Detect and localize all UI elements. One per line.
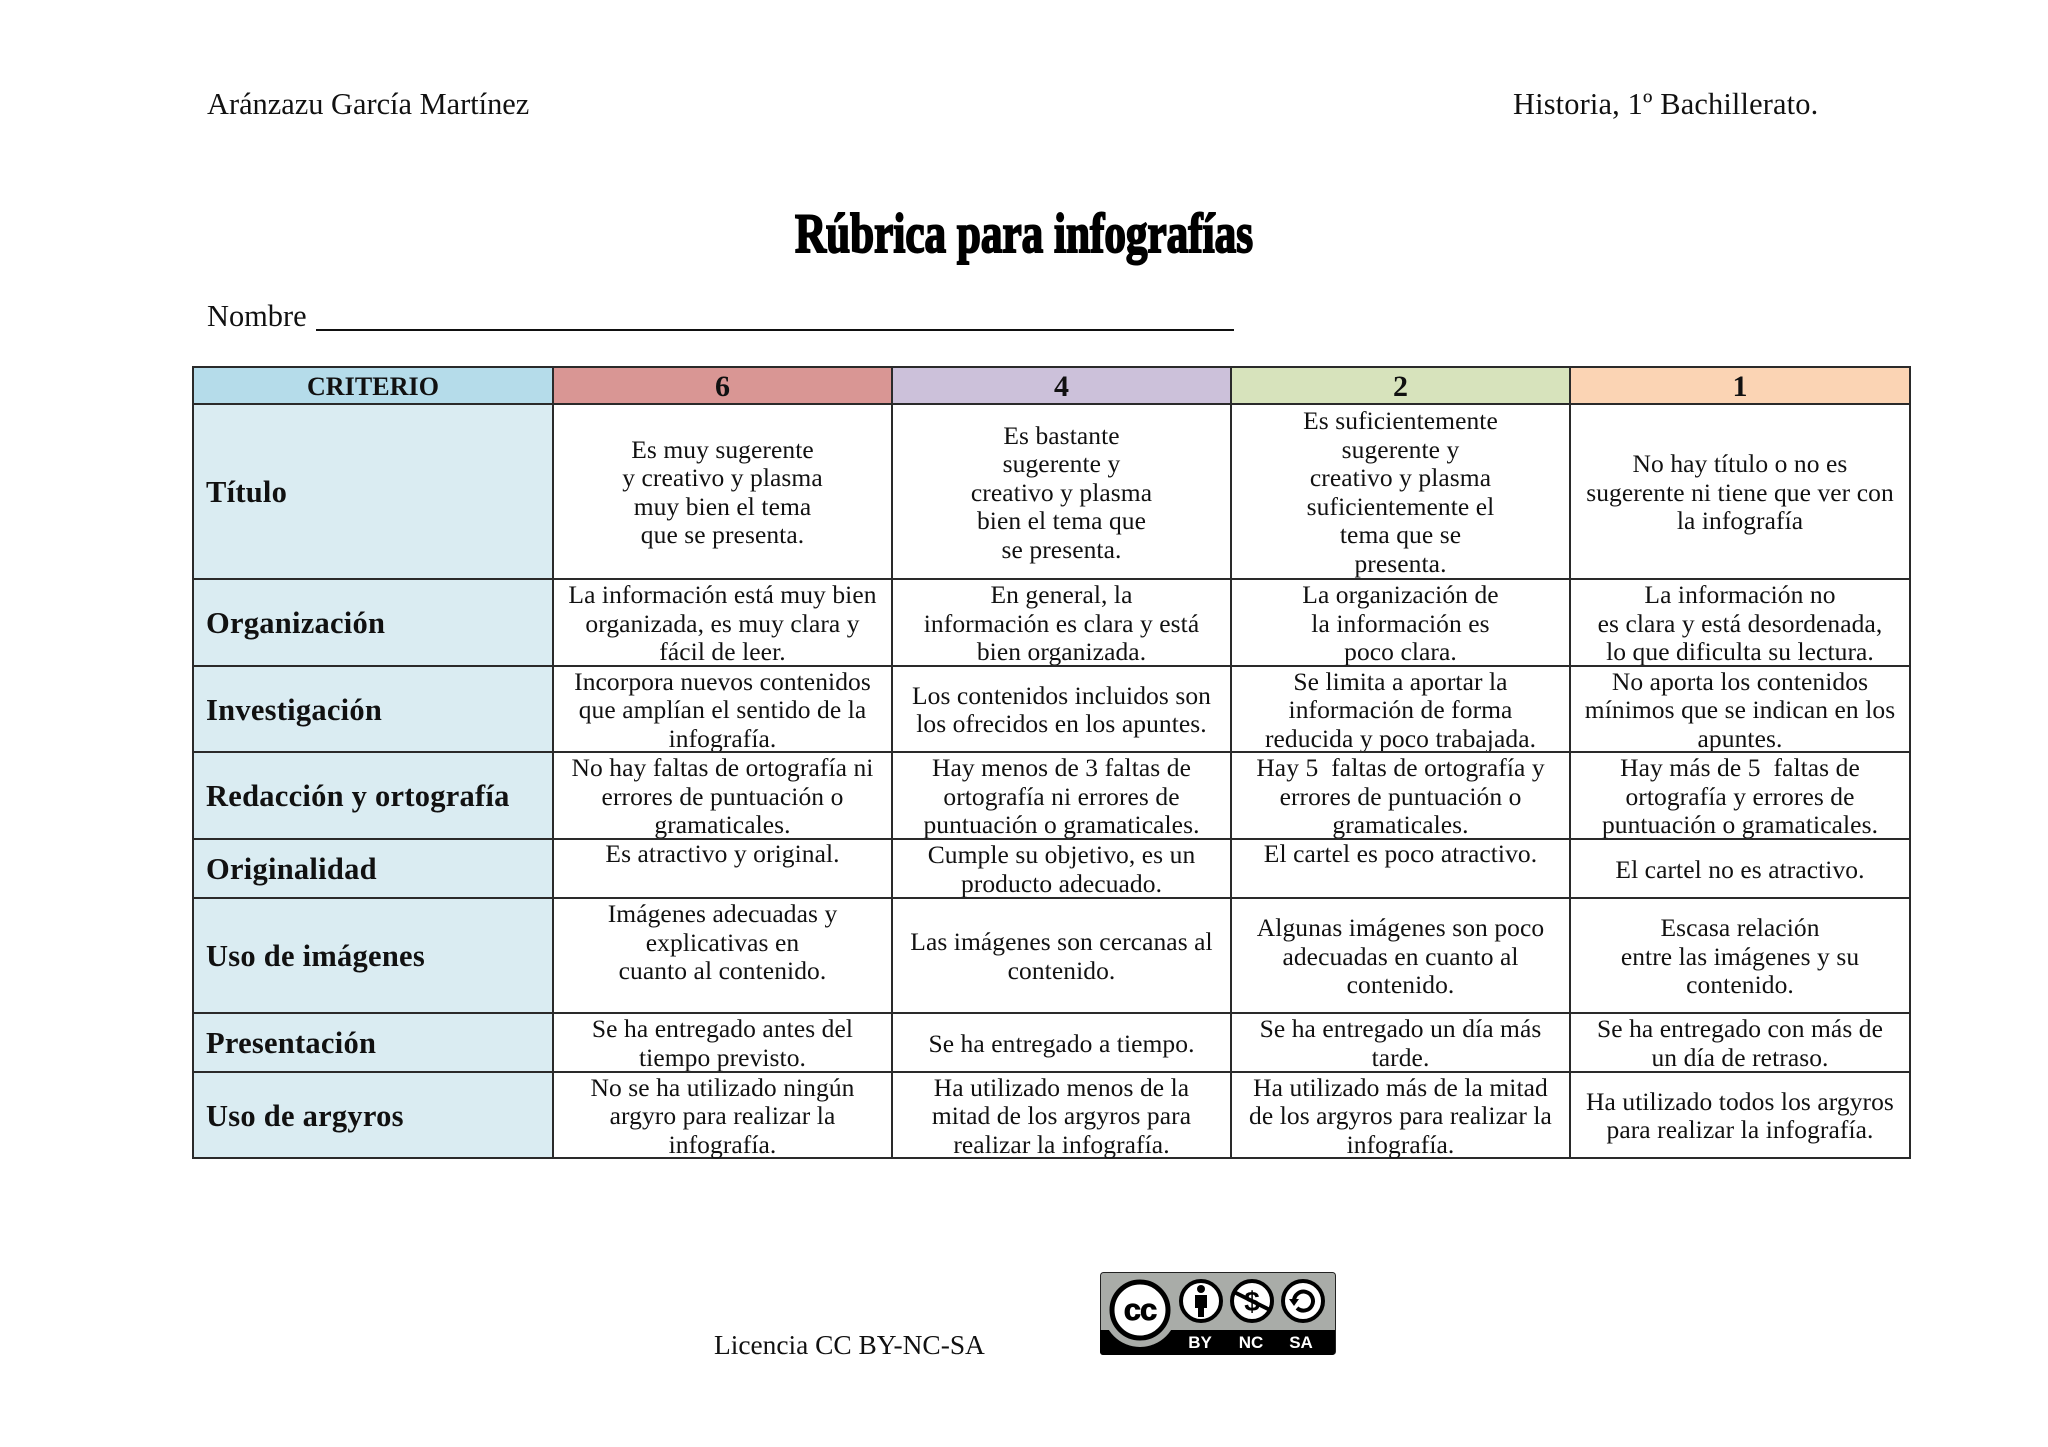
Originalidad, score 6: Es atractivo y original.	[605, 839, 840, 868]
Uso de imágenes, score 2: contenido.	[1347, 970, 1454, 999]
Uso de imágenes, score 1: entre las imágenes y su	[1621, 942, 1859, 970]
Uso de argyros, score 6	[552, 1071, 893, 1159]
Investigación, score 2	[1230, 665, 1571, 753]
row label: Presentación: Presentación	[206, 1026, 376, 1060]
icon: Creative Commons BY-NC-SA badge	[1100, 1272, 1336, 1355]
Redacción, score 4	[891, 751, 1232, 840]
Uso de imágenes, score 4	[891, 897, 1232, 1014]
name label: Nombre	[207, 299, 307, 333]
Investigación, score 4: los ofrecidos en los apuntes.	[916, 709, 1207, 738]
icon: share-alike	[1283, 1281, 1323, 1321]
Organización, score 6: organizada, es muy clara y	[585, 608, 860, 638]
Uso de argyros, score 4	[891, 1071, 1232, 1159]
badge labels: BY	[1188, 1333, 1212, 1352]
Redacción, score 4: puntuación o gramaticales.	[923, 810, 1200, 839]
Presentación, score 2: Se ha entregado un día más	[1260, 1014, 1541, 1043]
Título, score 4: bien el tema que	[977, 506, 1146, 535]
header: criterio	[192, 366, 554, 405]
Organización, score 4: bien organizada.	[977, 637, 1146, 666]
row label: Título: Título	[206, 475, 287, 509]
Originalidad, score 2: El cartel es poco atractivo.	[1264, 839, 1537, 868]
Título, score 2: tema que se	[1340, 520, 1461, 549]
Título, score 6: y creativo y plasma	[622, 463, 823, 492]
row label: Originalidad	[192, 838, 554, 899]
Investigación, score 1: No aporta los contenidos	[1612, 666, 1868, 696]
Uso de imágenes, score 2: Algunas imágenes son poco	[1257, 913, 1544, 942]
Redacción, score 6: errores de puntuación o	[602, 782, 843, 810]
icon: attribution	[1181, 1281, 1221, 1321]
Título, score 2: Es suficientemente	[1303, 406, 1498, 435]
Uso de argyros, score 2: Ha utilizado más de la mitad	[1253, 1072, 1548, 1102]
Organización, score 1: La información no	[1644, 580, 1836, 609]
Uso de argyros, score 4: realizar la infografía.	[953, 1130, 1170, 1158]
Organización, score 1: lo que dificulta su lectura.	[1606, 637, 1874, 666]
Organización, score 4: En general, la	[990, 580, 1132, 609]
Redacción, score 2	[1230, 751, 1571, 840]
row label: Uso de imágenes	[192, 897, 554, 1014]
Investigación, score 6: que amplían el sentido de la	[579, 695, 866, 724]
Uso de argyros, score 1: Ha utilizado todos los argyros	[1586, 1087, 1894, 1116]
Redacción, score 4: Hay menos de 3 faltas de	[932, 753, 1191, 782]
Investigación, score 6: infografía.	[669, 724, 776, 752]
icon: non-commercial: $	[1244, 1286, 1260, 1317]
header: score 6	[552, 366, 893, 405]
badge labels: SA	[1289, 1333, 1313, 1352]
Presentación, score 1	[1569, 1012, 1911, 1073]
Redacción, score 1: puntuación o gramaticales.	[1602, 810, 1878, 839]
Uso de argyros, score 6: No se ha utilizado ningún	[590, 1072, 855, 1102]
rubric table	[192, 366, 1911, 1159]
Uso de argyros, score 4: Ha utilizado menos de la	[934, 1072, 1189, 1102]
header: criterio: CRITERIO	[307, 372, 439, 400]
row label: Originalidad: Originalidad	[206, 852, 377, 886]
Investigación, score 1	[1569, 665, 1911, 753]
Redacción, score 6: gramaticales.	[654, 810, 791, 839]
header: score 2	[1230, 366, 1571, 405]
Organización, score 2	[1230, 578, 1571, 667]
Título, score 1: No hay título o no es	[1633, 449, 1847, 478]
name line	[316, 329, 1234, 331]
Presentación, score 6	[552, 1012, 893, 1073]
Organización, score 6: fácil de leer.	[659, 637, 786, 666]
Uso de argyros, score 6: argyro para realizar la	[610, 1101, 835, 1130]
Uso de argyros, score 1: para realizar la infografía.	[1606, 1115, 1873, 1144]
icon: non-commercial	[1232, 1281, 1272, 1321]
row label: Organización: Organización	[206, 606, 385, 640]
Título, score 2: suficientemente el	[1307, 492, 1494, 521]
row label: Uso de argyros	[192, 1071, 554, 1159]
Título, score 4: Es bastante	[1003, 420, 1120, 450]
Redacción, score 6: No hay faltas de ortografía ni	[572, 753, 873, 782]
icon: cc: cc	[1124, 1292, 1157, 1327]
Investigación, score 2: reducida y poco trabajada.	[1265, 724, 1536, 752]
Presentación, score 2	[1230, 1012, 1571, 1073]
icon: cc	[1112, 1282, 1168, 1338]
Título, score 6: Es muy sugerente	[631, 435, 814, 464]
Investigación, score 1: apuntes.	[1698, 724, 1782, 752]
Presentación, score 6: Se ha entregado antes del	[592, 1014, 853, 1043]
row label: Uso de argyros: Uso de argyros	[206, 1098, 404, 1132]
Uso de argyros, score 4: mitad de los argyros para	[932, 1101, 1191, 1130]
Redacción, score 4: ortografía ni errores de	[943, 782, 1180, 810]
Organización, score 2: poco clara.	[1344, 637, 1457, 666]
Investigación, score 2: información de forma	[1289, 695, 1512, 724]
Investigación, score 4: Los contenidos incluidos son	[912, 681, 1211, 710]
author name: Aránzazu García Martínez	[207, 87, 529, 121]
row label: Organización	[192, 578, 554, 667]
Presentación, score 2: tarde.	[1372, 1043, 1429, 1072]
Uso de imágenes, score 1: Escasa relación	[1660, 913, 1820, 942]
Título, score 1: sugerente ni tiene que ver con	[1586, 478, 1894, 506]
Investigación, score 4	[891, 665, 1232, 753]
Organización, score 6: La información está muy bien	[568, 580, 877, 609]
badge labels: NC	[1239, 1333, 1263, 1352]
row label: Uso de imágenes: Uso de imágenes	[206, 939, 425, 973]
header: score 4: 4	[1054, 370, 1069, 402]
header: score 1: 1	[1732, 370, 1748, 402]
license label: Licencia CC BY-NC-SA	[714, 1330, 985, 1360]
Título, score 2	[1230, 403, 1571, 580]
course label: Historia, 1º Bachillerato.	[1513, 87, 1818, 121]
Título, score 2: sugerente y	[1342, 435, 1459, 464]
Presentación, score 4	[891, 1012, 1232, 1073]
Investigación, score 6	[552, 665, 893, 753]
Título, score 4: se presenta.	[1002, 534, 1121, 564]
Título, score 6	[552, 403, 893, 580]
Originalidad, score 4: producto adecuado.	[961, 869, 1162, 898]
Presentación, score 6: tiempo previsto.	[639, 1043, 806, 1072]
Presentación, score 1: un día de retraso.	[1651, 1043, 1829, 1072]
Uso de imágenes, score 4: contenido.	[1008, 956, 1115, 985]
Organización, score 6	[552, 578, 893, 667]
Uso de imágenes, score 2: adecuadas en cuanto al	[1282, 942, 1519, 970]
Redacción, score 2: Hay 5 faltas de ortografía y	[1256, 753, 1545, 782]
Redacción, score 2: errores de puntuación o	[1280, 782, 1521, 810]
Presentación, score 4: Se ha entregado a tiempo.	[928, 1028, 1195, 1058]
Uso de imágenes, score 1: contenido.	[1686, 970, 1794, 999]
Uso de imágenes, score 1	[1569, 897, 1911, 1014]
Originalidad, score 2	[1230, 838, 1571, 899]
Uso de imágenes, score 4: Las imágenes son cercanas al	[910, 927, 1213, 956]
Título, score 4: sugerente y	[1003, 449, 1120, 478]
Investigación, score 6: Incorpora nuevos contenidos	[574, 666, 871, 696]
Título, score 1: la infografía	[1677, 506, 1803, 535]
Título, score 4	[891, 403, 1232, 580]
Organización, score 2: La organización de	[1302, 580, 1499, 609]
Organización, score 4	[891, 578, 1232, 667]
header: score 6: 6	[715, 370, 730, 402]
Título, score 6: muy bien el tema	[634, 492, 811, 521]
row label: Presentación	[192, 1012, 554, 1073]
Originalidad, score 1	[1569, 838, 1911, 899]
Originalidad, score 4	[891, 838, 1232, 899]
Uso de imágenes, score 2	[1230, 897, 1571, 1014]
Redacción, score 2: gramaticales.	[1332, 810, 1469, 839]
Uso de argyros, score 6: infografía.	[669, 1130, 776, 1158]
header: score 4	[891, 366, 1232, 405]
Redacción, score 1: Hay más de 5 faltas de	[1620, 753, 1860, 782]
Originalidad, score 1: El cartel no es atractivo.	[1615, 854, 1865, 884]
Título, score 2: presenta.	[1354, 549, 1447, 578]
Investigación, score 2: Se limita a aportar la	[1293, 666, 1508, 696]
Título, score 1	[1569, 403, 1911, 580]
Uso de imágenes, score 6: cuanto al contenido.	[619, 956, 826, 985]
row label: Redacción y ortografía	[192, 751, 554, 840]
Uso de argyros, score 2: de los argyros para realizar la	[1249, 1101, 1552, 1130]
badge labels	[1188, 1333, 1313, 1352]
Investigación, score 1: mínimos que se indican en los	[1585, 695, 1895, 724]
row label: Redacción y ortografía: Redacción y ortografía	[206, 779, 510, 813]
Redacción, score 1: ortografía y errores de	[1625, 782, 1855, 810]
Redacción, score 6	[552, 751, 893, 840]
row label: Título	[192, 403, 554, 580]
Originalidad, score 6	[552, 838, 893, 899]
Redacción, score 1	[1569, 751, 1911, 840]
Título, score 4: creativo y plasma	[971, 478, 1152, 506]
Título, score 6: que se presenta.	[641, 520, 804, 549]
Uso de imágenes, score 6	[552, 897, 893, 1014]
Uso de imágenes, score 6: explicativas en	[646, 928, 799, 956]
Título, score 2: creativo y plasma	[1310, 463, 1491, 492]
Organización, score 1	[1569, 578, 1911, 667]
row label: Investigación	[192, 665, 554, 753]
header: score 2: 2	[1393, 370, 1408, 402]
header: score 1	[1569, 366, 1911, 405]
Uso de argyros, score 2: infografía.	[1347, 1130, 1454, 1158]
Uso de imágenes, score 6: Imágenes adecuadas y	[608, 899, 837, 928]
Originalidad, score 4: Cumple su objetivo, es un	[928, 840, 1195, 869]
Organización, score 2: la información es	[1311, 608, 1490, 638]
Presentación, score 1: Se ha entregado con más de	[1597, 1014, 1883, 1043]
Organización, score 4: información es clara y está	[924, 608, 1199, 638]
Uso de argyros, score 2	[1230, 1071, 1571, 1159]
row label: Investigación: Investigación	[206, 692, 382, 726]
Organización, score 1: es clara y está desordenada,	[1598, 608, 1882, 638]
Uso de argyros, score 1	[1569, 1071, 1911, 1159]
